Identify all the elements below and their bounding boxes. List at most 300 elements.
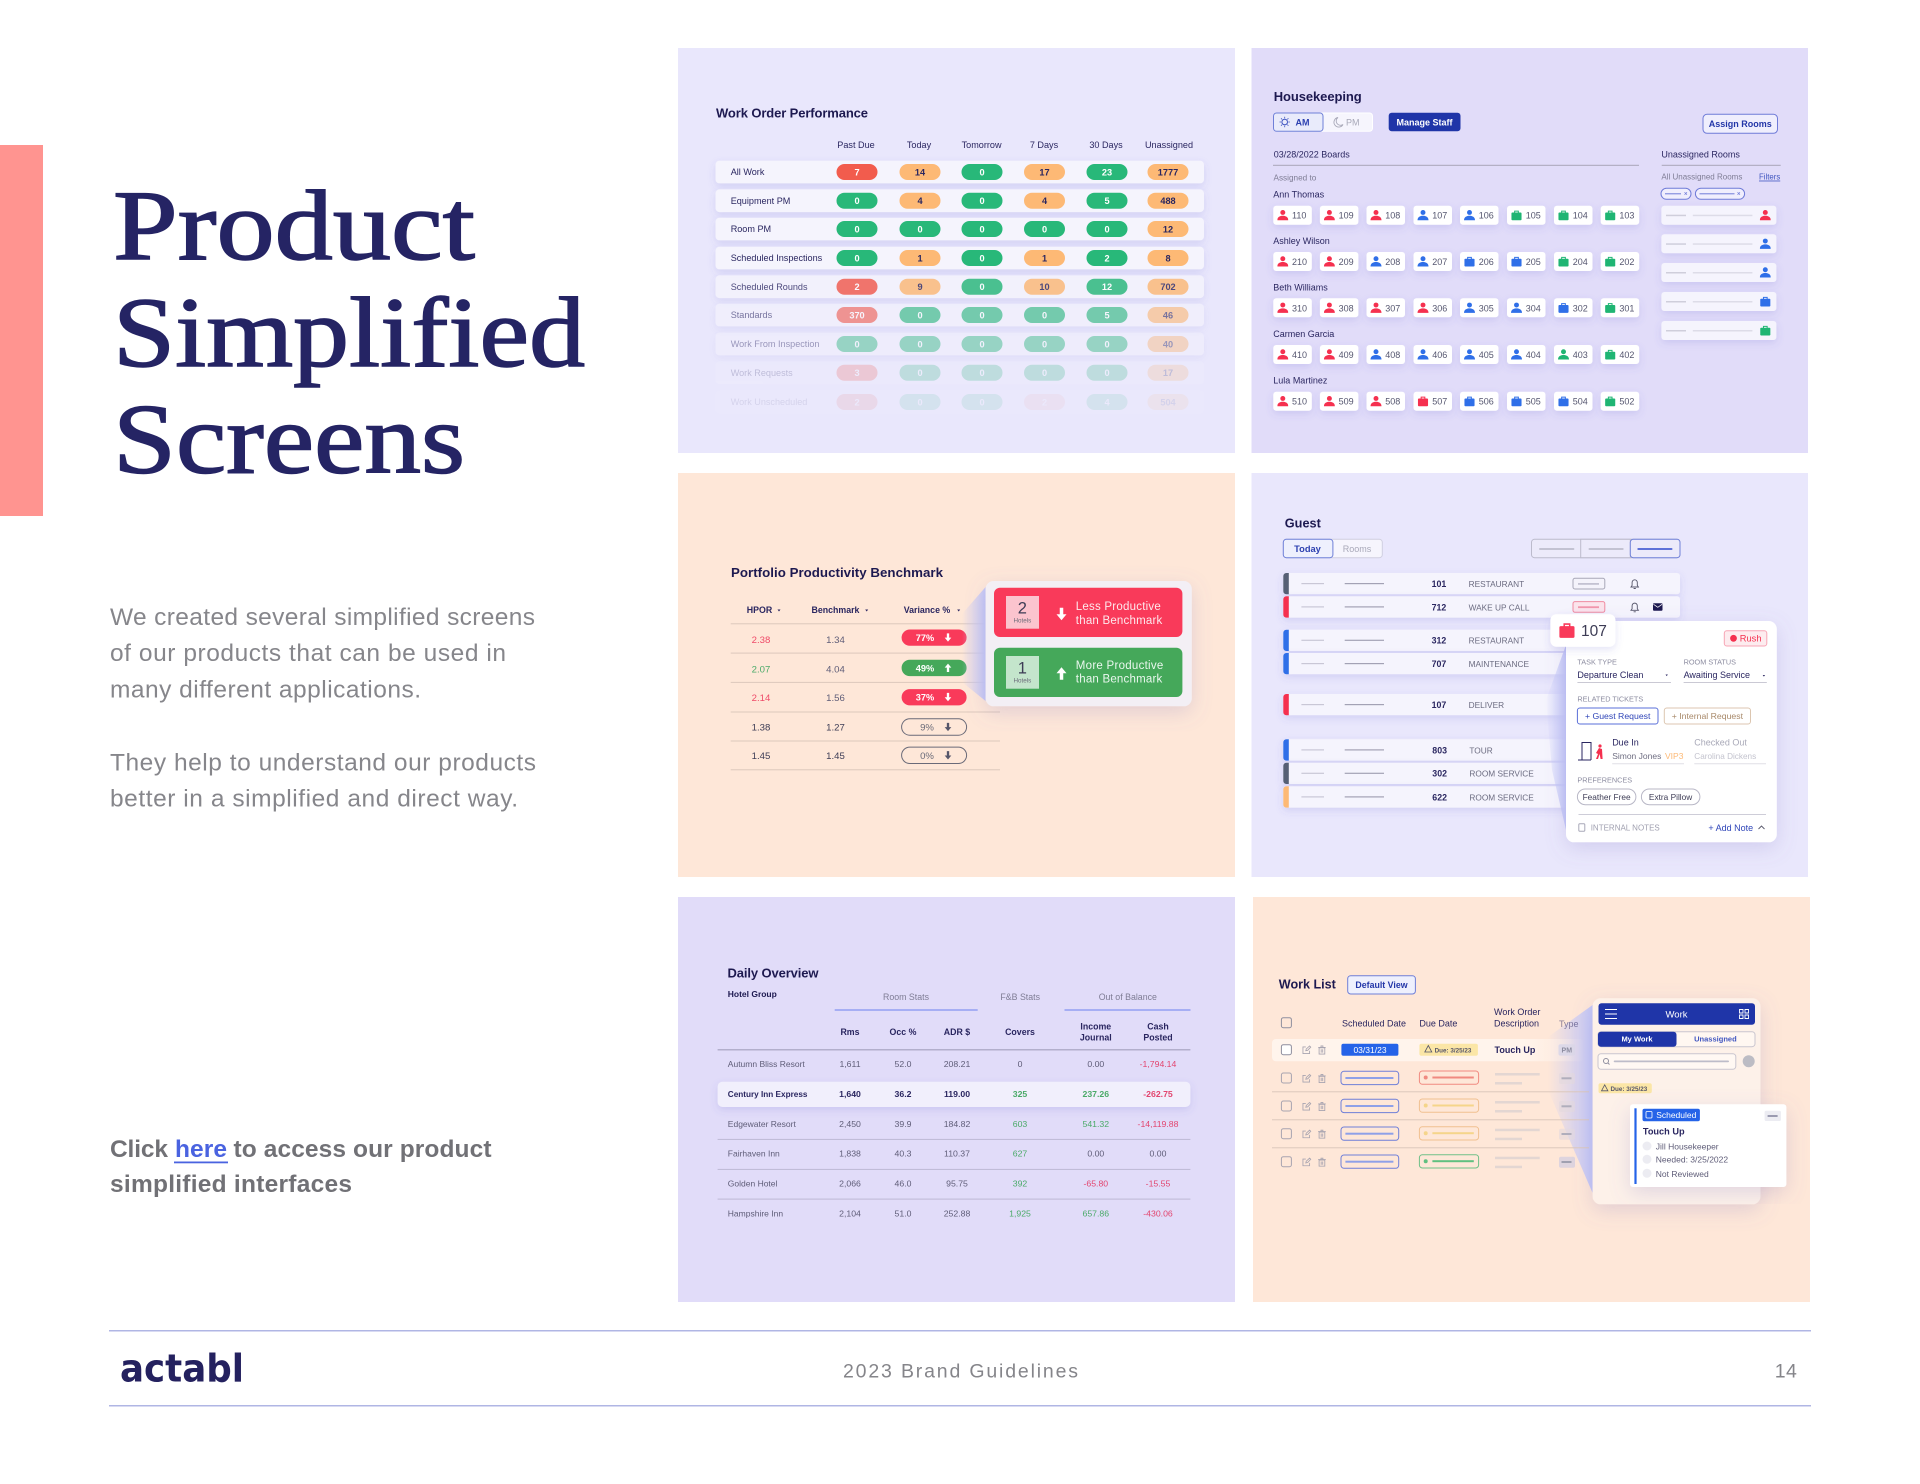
work row placeholder 4: [1281, 1155, 1575, 1168]
panel: guest: [1252, 473, 1808, 877]
summary: less productive: Less Productive: [1076, 601, 1161, 613]
task row 302: [1283, 763, 1680, 784]
work row placeholder 2: [1281, 1099, 1575, 1113]
row: fairhaven inn: [728, 1149, 1167, 1159]
staff: beth williams: Beth Williams: [1273, 282, 1328, 292]
view switcher: [1532, 539, 1680, 558]
scheduled card: Jill Housekeeper: [1656, 1142, 1719, 1152]
panel: work order performance: [678, 48, 1235, 453]
staff: lula martinez: 502: [1619, 397, 1634, 407]
staff: ashley wilson: 206: [1479, 257, 1494, 267]
benchmark row 2: 49%: [916, 663, 934, 673]
row: room pm: [716, 218, 1204, 240]
staff: ashley wilson: 209: [1339, 257, 1354, 267]
column headers: Occ %: [890, 1027, 917, 1037]
due badge: Due: 3/25/23: [1610, 1086, 1648, 1093]
callout wedge: [962, 587, 986, 701]
row: hampshire inn: 51.0: [895, 1208, 912, 1218]
task row 312: [1283, 630, 1680, 651]
staff: ann thomas: 104: [1573, 211, 1588, 221]
row: work unscheduled: 4: [1104, 397, 1110, 407]
phone tabs: My Work: [1621, 1035, 1653, 1044]
summary: more productive: than Benchmark: [1076, 673, 1163, 685]
staff: beth williams: 305: [1479, 303, 1494, 313]
call to action link: to access our product: [234, 1136, 492, 1163]
task row 622: [1283, 786, 1680, 808]
title: Screens: [113, 384, 465, 494]
summary: more productive: [994, 648, 1182, 697]
row: scheduled inspections: 1: [1042, 253, 1047, 263]
row: all work: 14: [915, 167, 926, 177]
benchmark row 5: [752, 747, 967, 764]
column headers: Income: [1080, 1022, 1111, 1032]
preferences: Extra Pillow: [1649, 792, 1693, 802]
related tickets: + Internal Request: [1672, 711, 1744, 721]
row: hampshire inn: -430.06: [1143, 1208, 1173, 1218]
staff: carmen garcia: Carmen Garcia: [1273, 329, 1334, 339]
row: golden hotel: [728, 1179, 1170, 1189]
group headers: Out of Balance: [1099, 992, 1157, 1002]
benchmark row 2: 2.07: [752, 664, 770, 675]
row: work from inspection: Work From Inspection: [731, 339, 819, 349]
row: golden hotel: Golden Hotel: [728, 1179, 778, 1189]
heading: daily overview: Daily Overview: [728, 966, 819, 980]
row: all work: All Work: [731, 167, 765, 177]
footer: [109, 1330, 1811, 1406]
staff: beth williams: 301: [1619, 303, 1634, 313]
staff: lula martinez: 508: [1385, 397, 1400, 407]
benchmark row 1: 1.34: [826, 635, 845, 646]
row rules: [1272, 1091, 1589, 1148]
table header: HPOR: [747, 605, 773, 615]
row: room pm: Room PM: [731, 224, 771, 234]
staff: beth williams: 302: [1573, 303, 1588, 313]
staff: ann thomas: [1273, 190, 1639, 225]
task row 312: RESTAURANT: [1469, 636, 1524, 646]
row: scheduled rounds: 12: [1102, 282, 1112, 292]
benchmark row 5: 1.45: [752, 751, 770, 762]
staff: lula martinez: 506: [1479, 397, 1494, 407]
panel: daily overview: [678, 897, 1235, 1302]
row: hampshire inn: 2,104: [839, 1208, 861, 1218]
preferences: PREFERENCES: [1577, 776, 1632, 785]
summary: more productive: Hotels: [1013, 678, 1031, 684]
row: equipment pm: [716, 189, 1204, 212]
panel: housekeeping: [1252, 48, 1808, 453]
row: work unscheduled: 2: [854, 397, 860, 407]
summary: less productive: Hotels: [1013, 618, 1031, 624]
staff: ashley wilson: 210: [1292, 257, 1307, 267]
row: work requests: 0: [1042, 368, 1047, 378]
staff: carmen garcia: 403: [1573, 350, 1588, 360]
row: hampshire inn: 1,925: [1009, 1208, 1031, 1218]
row: equipment pm: 0: [979, 196, 985, 206]
boards date heading: 03/28/2022 Boards: [1274, 150, 1350, 160]
task type and room status: Departure Clean: [1577, 670, 1643, 680]
row: scheduled inspections: 1: [917, 253, 923, 263]
row: edgewater resort: [728, 1119, 1179, 1129]
staff: ann thomas: 110: [1292, 211, 1306, 221]
column headers: Unassigned: [1145, 140, 1193, 150]
column headers: Rms: [840, 1027, 860, 1037]
row: golden hotel: 392: [1013, 1179, 1027, 1189]
scheduled card: [1630, 1104, 1786, 1187]
default view button: Default View: [1355, 980, 1408, 990]
staff: ann thomas: 108: [1385, 211, 1400, 221]
staff: ann thomas: 103: [1619, 211, 1634, 221]
phone mockup: [1593, 998, 1786, 1204]
staff: lula martinez: [1273, 376, 1639, 411]
row: work from inspection: 0: [854, 339, 860, 349]
benchmark row 3: [752, 689, 967, 705]
task row 302: 302: [1432, 769, 1447, 779]
staff: ashley wilson: 202: [1619, 257, 1634, 267]
task row 707: [1283, 653, 1680, 674]
staff: ashley wilson: Ashley Wilson: [1273, 236, 1330, 246]
today rooms toggle: Today: [1294, 544, 1322, 554]
row: equipment pm: 5: [1104, 196, 1110, 206]
row: century inn express: 325: [1013, 1089, 1027, 1099]
staff: ashley wilson: 208: [1385, 257, 1400, 267]
row: scheduled inspections: 0: [979, 253, 985, 263]
benchmark row 1: [752, 630, 967, 646]
row: equipment pm: 0: [854, 196, 860, 206]
row: work from inspection: 0: [1104, 339, 1110, 349]
row: scheduled inspections: 0: [854, 253, 860, 263]
row: edgewater resort: 2,450: [839, 1119, 861, 1129]
task row 707: 707: [1432, 659, 1446, 669]
column headers: ADR $: [944, 1027, 970, 1037]
scheduled card: Scheduled: [1656, 1110, 1697, 1120]
today rooms toggle: [1283, 539, 1382, 558]
highlighted work row: Touch Up: [1494, 1045, 1536, 1055]
column headers: Past Due: [837, 140, 875, 150]
guest status: Carolina Dickens: [1694, 752, 1756, 761]
button: manage staff: [1389, 113, 1460, 131]
task row 101: RESTAURANT: [1469, 579, 1524, 589]
unassigned rooms column: Unassigned Rooms: [1661, 150, 1740, 160]
unassigned rooms column: Filters: [1759, 173, 1780, 182]
due badge: [1598, 1083, 1652, 1093]
benchmark row 4: 1.38: [752, 722, 770, 734]
task row 712: 712: [1432, 602, 1446, 612]
am pm toggle: [1274, 113, 1372, 131]
staff: lula martinez: 507: [1432, 397, 1447, 407]
heading: work list: Work List: [1279, 978, 1337, 992]
summary: less productive: 2: [1018, 600, 1027, 618]
row: standards: [716, 304, 1204, 326]
row: standards: Standards: [731, 310, 773, 320]
task type and room status: TASK TYPE: [1577, 657, 1617, 666]
staff: lula martinez: 504: [1573, 397, 1588, 407]
benchmark row 3: 2.14: [752, 693, 771, 704]
rush tag: Rush: [1740, 634, 1762, 644]
row: century inn express: 237.26: [1083, 1089, 1109, 1099]
row: work requests: 0: [917, 368, 923, 378]
row: hampshire inn: Hampshire Inn: [728, 1208, 783, 1218]
staff: lula martinez: Lula Martinez: [1273, 376, 1328, 386]
logo: actabl: actabl: [120, 1346, 244, 1390]
row: autumn bliss resort: 0: [1018, 1059, 1023, 1069]
group headers: [835, 992, 1190, 1010]
row: equipment pm: Equipment PM: [731, 196, 790, 206]
row: scheduled rounds: 702: [1160, 282, 1176, 292]
row: century inn express: -262.75: [1143, 1089, 1173, 1099]
column headers: [837, 140, 1193, 150]
assigned to label: Assigned to: [1274, 174, 1317, 182]
related tickets: + Guest Request: [1585, 711, 1651, 721]
icon: door with guest: [1578, 742, 1603, 760]
detail wedge: [1546, 645, 1566, 830]
staff: beth williams: 304: [1526, 303, 1541, 313]
staff: carmen garcia: 404: [1526, 350, 1541, 360]
task type and room status: ROOM STATUS: [1684, 657, 1736, 666]
related tickets: [1577, 694, 1750, 724]
footer label: 2023 Brand Guidelines: [843, 1360, 1078, 1382]
row: standards: 0: [917, 310, 923, 320]
table header: Variance %: [904, 605, 950, 615]
row: edgewater resort: 541.32: [1083, 1119, 1109, 1129]
row: fairhaven inn: 0.00: [1150, 1149, 1167, 1159]
row: autumn bliss resort: 52.0: [895, 1059, 912, 1069]
phone header: Work: [1666, 1009, 1688, 1020]
staff: beth williams: 307: [1385, 303, 1400, 313]
staff: lula martinez: 505: [1526, 397, 1541, 407]
staff: ann thomas: Ann Thomas: [1273, 190, 1325, 200]
table header: [1281, 1007, 1579, 1029]
row: edgewater resort: 184.82: [944, 1119, 970, 1129]
row: all work: 17: [1039, 167, 1050, 177]
task type and room status: Awaiting Service: [1684, 670, 1750, 680]
row: room pm: 0: [1104, 224, 1110, 234]
panel: portfolio productivity benchmark: [678, 473, 1235, 877]
task row 803: TOUR: [1469, 745, 1493, 755]
row: work unscheduled: [716, 391, 1204, 413]
column headers: 30 Days: [1089, 140, 1123, 150]
row: scheduled rounds: 9: [917, 282, 923, 292]
row: work from inspection: 0: [1042, 339, 1047, 349]
row: work requests: [716, 361, 1204, 384]
row: work requests: 0: [979, 368, 985, 378]
row: work unscheduled: 2: [1042, 397, 1047, 407]
row: work from inspection: 0: [917, 339, 923, 349]
column headers: Today: [907, 140, 932, 150]
row: room pm: 0: [1042, 224, 1047, 234]
button: assign rooms: Assign Rooms: [1709, 119, 1772, 129]
row: golden hotel: 46.0: [895, 1179, 912, 1189]
coral accent bar: [0, 145, 43, 516]
title: [113, 170, 585, 494]
staff: carmen garcia: 409: [1339, 350, 1354, 360]
row: work requests: 0: [1104, 368, 1110, 378]
row: standards: 0: [979, 310, 985, 320]
call to action link: [110, 1136, 492, 1198]
benchmark row 3: 1.56: [826, 693, 845, 704]
benchmark row 2: 4.04: [826, 664, 845, 675]
task row 101: [1283, 573, 1680, 594]
task row 302: ROOM SERVICE: [1469, 769, 1534, 779]
heading: housekeeping: Housekeeping: [1274, 89, 1362, 104]
detail card: room 107: [1566, 621, 1777, 842]
call to action link: here: [175, 1136, 227, 1163]
scheduled card: Touch Up: [1643, 1126, 1685, 1136]
table header: [747, 605, 960, 615]
row: equipment pm: 488: [1160, 196, 1176, 206]
internal notes: + Add Note: [1708, 823, 1753, 833]
row: scheduled inspections: 2: [1104, 253, 1110, 263]
row: equipment pm: 4: [1042, 196, 1048, 206]
row: scheduled inspections: [716, 247, 1204, 269]
preferences: Feather Free: [1583, 792, 1631, 802]
column headers: Covers: [1005, 1027, 1035, 1037]
phone tabs: Unassigned: [1694, 1035, 1737, 1044]
task row 107: 107: [1432, 700, 1446, 710]
intro paragraph: many different applications.: [110, 676, 421, 704]
table header: Work Order: [1494, 1007, 1540, 1017]
benchmark row 1: 2.38: [752, 635, 770, 646]
row: standards: 0: [1042, 310, 1047, 320]
unassigned rooms column: [1661, 150, 1781, 340]
row: scheduled rounds: 0: [979, 282, 985, 292]
benchmark row 4: 1.27: [826, 722, 845, 734]
row: fairhaven inn: 40.3: [895, 1149, 912, 1159]
row: edgewater resort: Edgewater Resort: [728, 1119, 796, 1129]
intro paragraph: better in a simplified and direct way.: [110, 786, 518, 813]
row: standards: 370: [849, 310, 865, 320]
staff: carmen garcia: 406: [1432, 350, 1447, 360]
row: century inn express: Century Inn Express: [728, 1090, 808, 1099]
am pm toggle: AM: [1296, 117, 1310, 127]
unassigned rooms column: All Unassigned Rooms: [1661, 173, 1742, 182]
row: golden hotel: 95.75: [946, 1179, 968, 1189]
row: edgewater resort: 39.9: [895, 1119, 912, 1129]
row: work from inspection: 40: [1163, 339, 1173, 349]
staff: ashley wilson: 204: [1573, 257, 1588, 267]
row: fairhaven inn: Fairhaven Inn: [728, 1149, 780, 1159]
row: work unscheduled: 504: [1160, 397, 1177, 407]
summary: more productive: More Productive: [1076, 660, 1163, 672]
preferences: [1577, 776, 1700, 805]
related tickets: RELATED TICKETS: [1577, 694, 1643, 703]
row: golden hotel: 2,066: [839, 1179, 861, 1189]
row: room pm: 12: [1163, 224, 1173, 234]
intro paragraph: [110, 604, 536, 813]
row: scheduled rounds: 2: [854, 282, 860, 292]
summary: more productive: 1: [1018, 660, 1027, 678]
row: work unscheduled: 0: [917, 397, 923, 407]
button: manage staff: Manage Staff: [1396, 117, 1454, 127]
row: edgewater resort: 603: [1013, 1119, 1027, 1129]
room 107 tag: [1550, 614, 1616, 647]
default view button: [1348, 976, 1415, 994]
intro paragraph: of our products that can be used in: [110, 640, 506, 667]
guest status: Simon Jones: [1612, 751, 1661, 761]
row: room pm: 0: [917, 224, 923, 234]
staff: ann thomas: 109: [1339, 211, 1354, 221]
guest status: [1578, 737, 1766, 764]
row: century inn express: [718, 1082, 1190, 1107]
row: all work: 1777: [1158, 167, 1178, 177]
summary: less productive: [994, 588, 1182, 637]
task row 712: WAKE UP CALL: [1469, 602, 1530, 612]
internal notes: INTERNAL NOTES: [1591, 824, 1660, 832]
row: golden hotel: -15.55: [1146, 1179, 1170, 1189]
row: room pm: 0: [854, 224, 860, 234]
staff: beth williams: 310: [1292, 303, 1307, 313]
task row 707: MAINTENANCE: [1469, 659, 1529, 669]
staff: carmen garcia: 408: [1385, 350, 1400, 360]
staff: carmen garcia: [1273, 329, 1639, 364]
column headers: Tomorrow: [962, 140, 1002, 150]
guest status: VIP3: [1665, 751, 1684, 761]
intro paragraph: They help to understand our products: [110, 749, 536, 776]
internal notes: [1579, 823, 1764, 833]
task row 107: DELIVER: [1469, 700, 1504, 710]
row: standards: 46: [1163, 310, 1173, 320]
task row 622: ROOM SERVICE: [1469, 792, 1534, 802]
row: fairhaven inn: 1,838: [839, 1149, 861, 1159]
row: equipment pm: 4: [917, 196, 923, 206]
staff: beth williams: [1273, 282, 1639, 317]
row: hampshire inn: [728, 1208, 1173, 1218]
staff: carmen garcia: 402: [1619, 350, 1634, 360]
staff: lula martinez: 510: [1292, 397, 1307, 407]
row: standards: 5: [1104, 310, 1110, 320]
title: Product: [113, 170, 475, 281]
heading: portfolio productivity benchmark: Portfolio Productivity Benchmark: [731, 565, 944, 580]
today rooms toggle: Rooms: [1343, 544, 1372, 554]
row: all work: 7: [854, 167, 860, 177]
row: work from inspection: [716, 333, 1204, 355]
row: work from inspection: 0: [979, 339, 985, 349]
row: work requests: 3: [854, 368, 860, 378]
staff: ann thomas: 105: [1526, 211, 1541, 221]
table header: Description: [1494, 1018, 1539, 1028]
summary: less productive: than Benchmark: [1076, 615, 1163, 627]
benchmark row 5: 1.45: [826, 751, 845, 762]
row: autumn bliss resort: 208.21: [944, 1059, 970, 1069]
staff: beth williams: 308: [1339, 303, 1354, 313]
table header: Benchmark: [812, 605, 860, 615]
row: fairhaven inn: 0.00: [1087, 1149, 1104, 1159]
call to action link: Click: [110, 1136, 168, 1163]
page number: 14: [1775, 1360, 1797, 1382]
row: scheduled rounds: Scheduled Rounds: [731, 282, 808, 292]
row: work requests: Work Requests: [731, 368, 793, 378]
row: scheduled rounds: [716, 275, 1204, 298]
group headers: Room Stats: [883, 992, 930, 1002]
column headers: Journal: [1080, 1032, 1112, 1042]
task row 101: 101: [1432, 579, 1446, 589]
heading: guest: Guest: [1285, 516, 1322, 530]
guest status: Due In: [1612, 737, 1639, 747]
staff: ashley wilson: 205: [1526, 257, 1541, 267]
task row 803: [1283, 739, 1680, 761]
staff: beth williams: 306: [1432, 303, 1447, 313]
row: autumn bliss resort: [728, 1059, 1177, 1069]
room 107 tag: 107: [1581, 623, 1607, 640]
column headers: [718, 1022, 1190, 1050]
row: hampshire inn: 657.86: [1083, 1208, 1109, 1218]
heading: work order performance: Work Order Performance: [716, 106, 868, 120]
staff: ashley wilson: [1273, 236, 1639, 271]
benchmark row 4: [752, 719, 967, 735]
staff: ann thomas: 106: [1479, 211, 1494, 221]
task row 712: [1283, 596, 1680, 618]
table header: Scheduled Date: [1342, 1018, 1406, 1028]
row: all work: 23: [1102, 167, 1112, 177]
row: century inn express: 1,640: [839, 1089, 861, 1099]
